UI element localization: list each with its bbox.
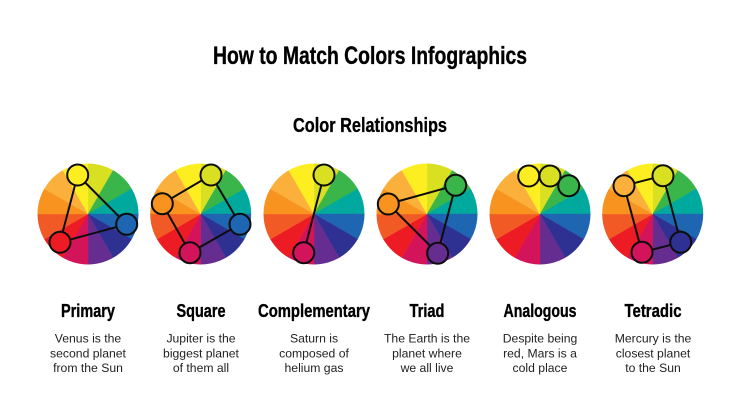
heading: complementary: Complementary: [258, 301, 370, 321]
text: tetradic description: to the Sun: [625, 361, 681, 375]
heading: tetradic: Tetradic: [624, 301, 682, 321]
text: tetradic description: Mercury is the: [615, 332, 691, 346]
color wheel: square: [131, 144, 271, 284]
color wheel: triad: [357, 144, 497, 284]
text: complementary description: composed of: [279, 346, 350, 360]
color wheel: tetradic: [583, 144, 723, 284]
text: triad description: [384, 332, 470, 375]
text: analogous description: cold place: [513, 361, 568, 375]
text: primary description: from the Sun: [53, 361, 123, 375]
panel: tetradic: [583, 144, 723, 375]
text: analogous description: [503, 332, 577, 375]
text: square description: [163, 332, 240, 375]
heading: triad: Triad: [410, 301, 444, 321]
text: tetradic description: closest planet: [616, 346, 691, 360]
text: analogous description: Despite being: [503, 332, 577, 346]
panel: primary: [18, 144, 158, 375]
text: analogous description: red, Mars is a: [503, 346, 577, 360]
text: primary description: [50, 332, 127, 375]
text: triad description: we all live: [400, 361, 454, 375]
color wheel: complementary: [244, 144, 384, 284]
text: square description: Jupiter is the: [166, 332, 236, 346]
panel: square: [131, 144, 271, 375]
text: triad description: planet where: [392, 346, 462, 360]
text: primary description: Venus is the: [55, 332, 121, 346]
heading: square: Square: [176, 301, 226, 321]
text: square description: biggest planet: [163, 346, 240, 360]
text: complementary description: helium gas: [285, 361, 343, 375]
heading: analogous: Analogous: [504, 301, 576, 321]
color wheel: analogous: [470, 144, 610, 284]
text: primary description: second planet: [50, 346, 127, 360]
heading: primary: Primary: [61, 301, 115, 321]
panel: triad: [357, 144, 497, 375]
text: square description: of them all: [173, 361, 229, 375]
text: tetradic description: [615, 332, 691, 375]
color wheel: primary triad: [18, 144, 158, 284]
text: complementary description: [279, 332, 350, 375]
text: triad description: The Earth is the: [384, 332, 470, 346]
subtitle: Color Relationships: [293, 115, 447, 137]
panel: analogous: [470, 144, 610, 375]
panel: complementary: [244, 144, 384, 375]
title: How to Match Colors Infographics: [213, 42, 527, 70]
text: complementary description: Saturn is: [290, 332, 338, 346]
